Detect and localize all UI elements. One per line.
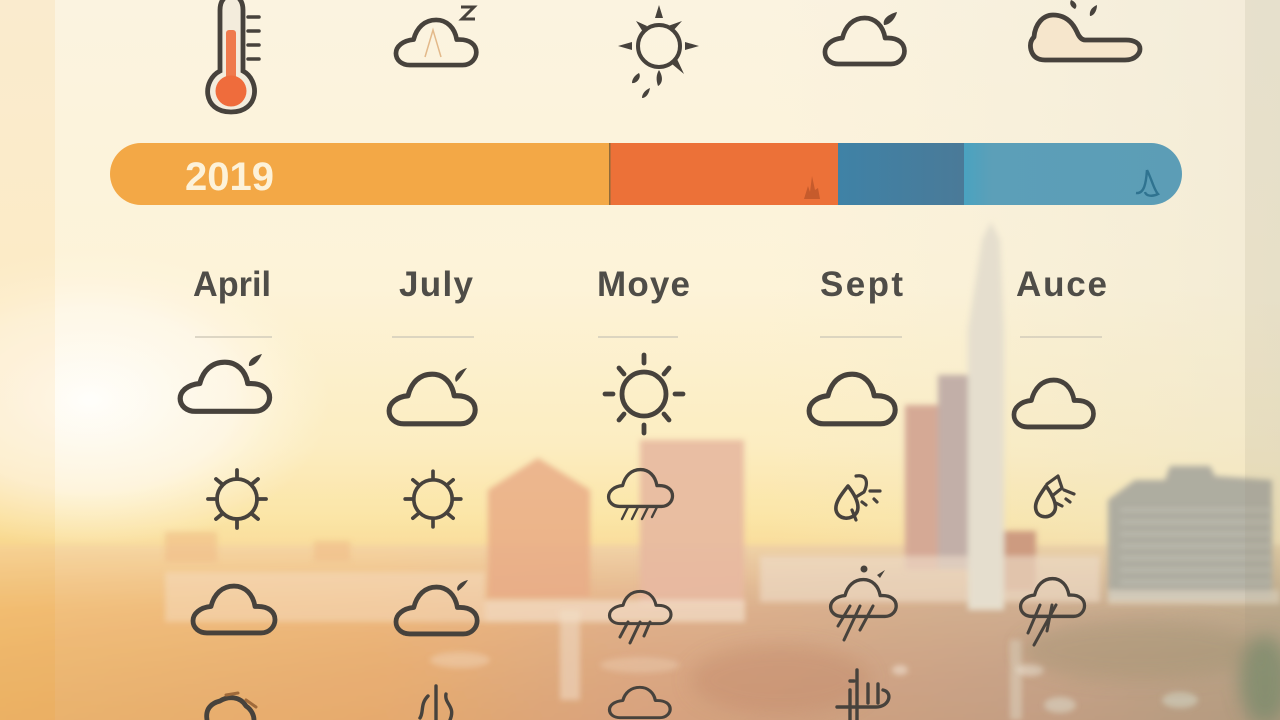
icon: cloud with drop xyxy=(396,580,477,634)
row 4 icons xyxy=(207,670,889,720)
month labels: Moye xyxy=(597,265,690,304)
icon: cloud with drop xyxy=(825,12,904,64)
icon: sun with rain drops xyxy=(618,5,699,98)
icon: partial cloud xyxy=(207,693,256,720)
icon: cloud July xyxy=(389,368,475,424)
icon: rain cloud xyxy=(610,591,671,643)
icon: wide cloud with sun drops xyxy=(1030,0,1140,60)
icon: sun and rain cloud xyxy=(831,566,896,640)
icon: sun xyxy=(405,471,461,527)
icon: branching stem xyxy=(420,686,452,720)
row 3 icons xyxy=(193,566,1085,645)
month labels xyxy=(193,265,1107,304)
month labels: July xyxy=(399,265,474,304)
bar mark: orange segment xyxy=(804,176,820,199)
month labels: Sept xyxy=(820,265,903,304)
icon: partial rain cloud xyxy=(609,687,670,718)
row 1 icons xyxy=(180,354,1093,433)
row 2 icons xyxy=(208,470,1074,528)
month labels: April xyxy=(193,265,271,304)
icon: cloud xyxy=(193,586,275,633)
icon: rain cloud xyxy=(609,470,673,519)
icon: cloud Auce xyxy=(1014,380,1093,427)
icon: cloud April xyxy=(180,354,270,411)
icon: cloud Sept xyxy=(809,374,895,424)
month labels: Auce xyxy=(1016,265,1107,304)
icon: sun Moye xyxy=(605,355,683,433)
icon: sun xyxy=(208,470,266,528)
icon: drop with sparks xyxy=(836,476,880,520)
icon: city with cloud xyxy=(837,670,889,720)
bar year label: 2019 xyxy=(185,155,274,199)
icon: cloud with z xyxy=(396,7,476,65)
icon: rain cloud xyxy=(1021,579,1085,645)
bar mark: blue segment xyxy=(1136,170,1158,196)
timeline bar xyxy=(110,143,1182,205)
icon: thermometer xyxy=(208,0,259,112)
icon: drop with sparks xyxy=(1036,476,1074,517)
